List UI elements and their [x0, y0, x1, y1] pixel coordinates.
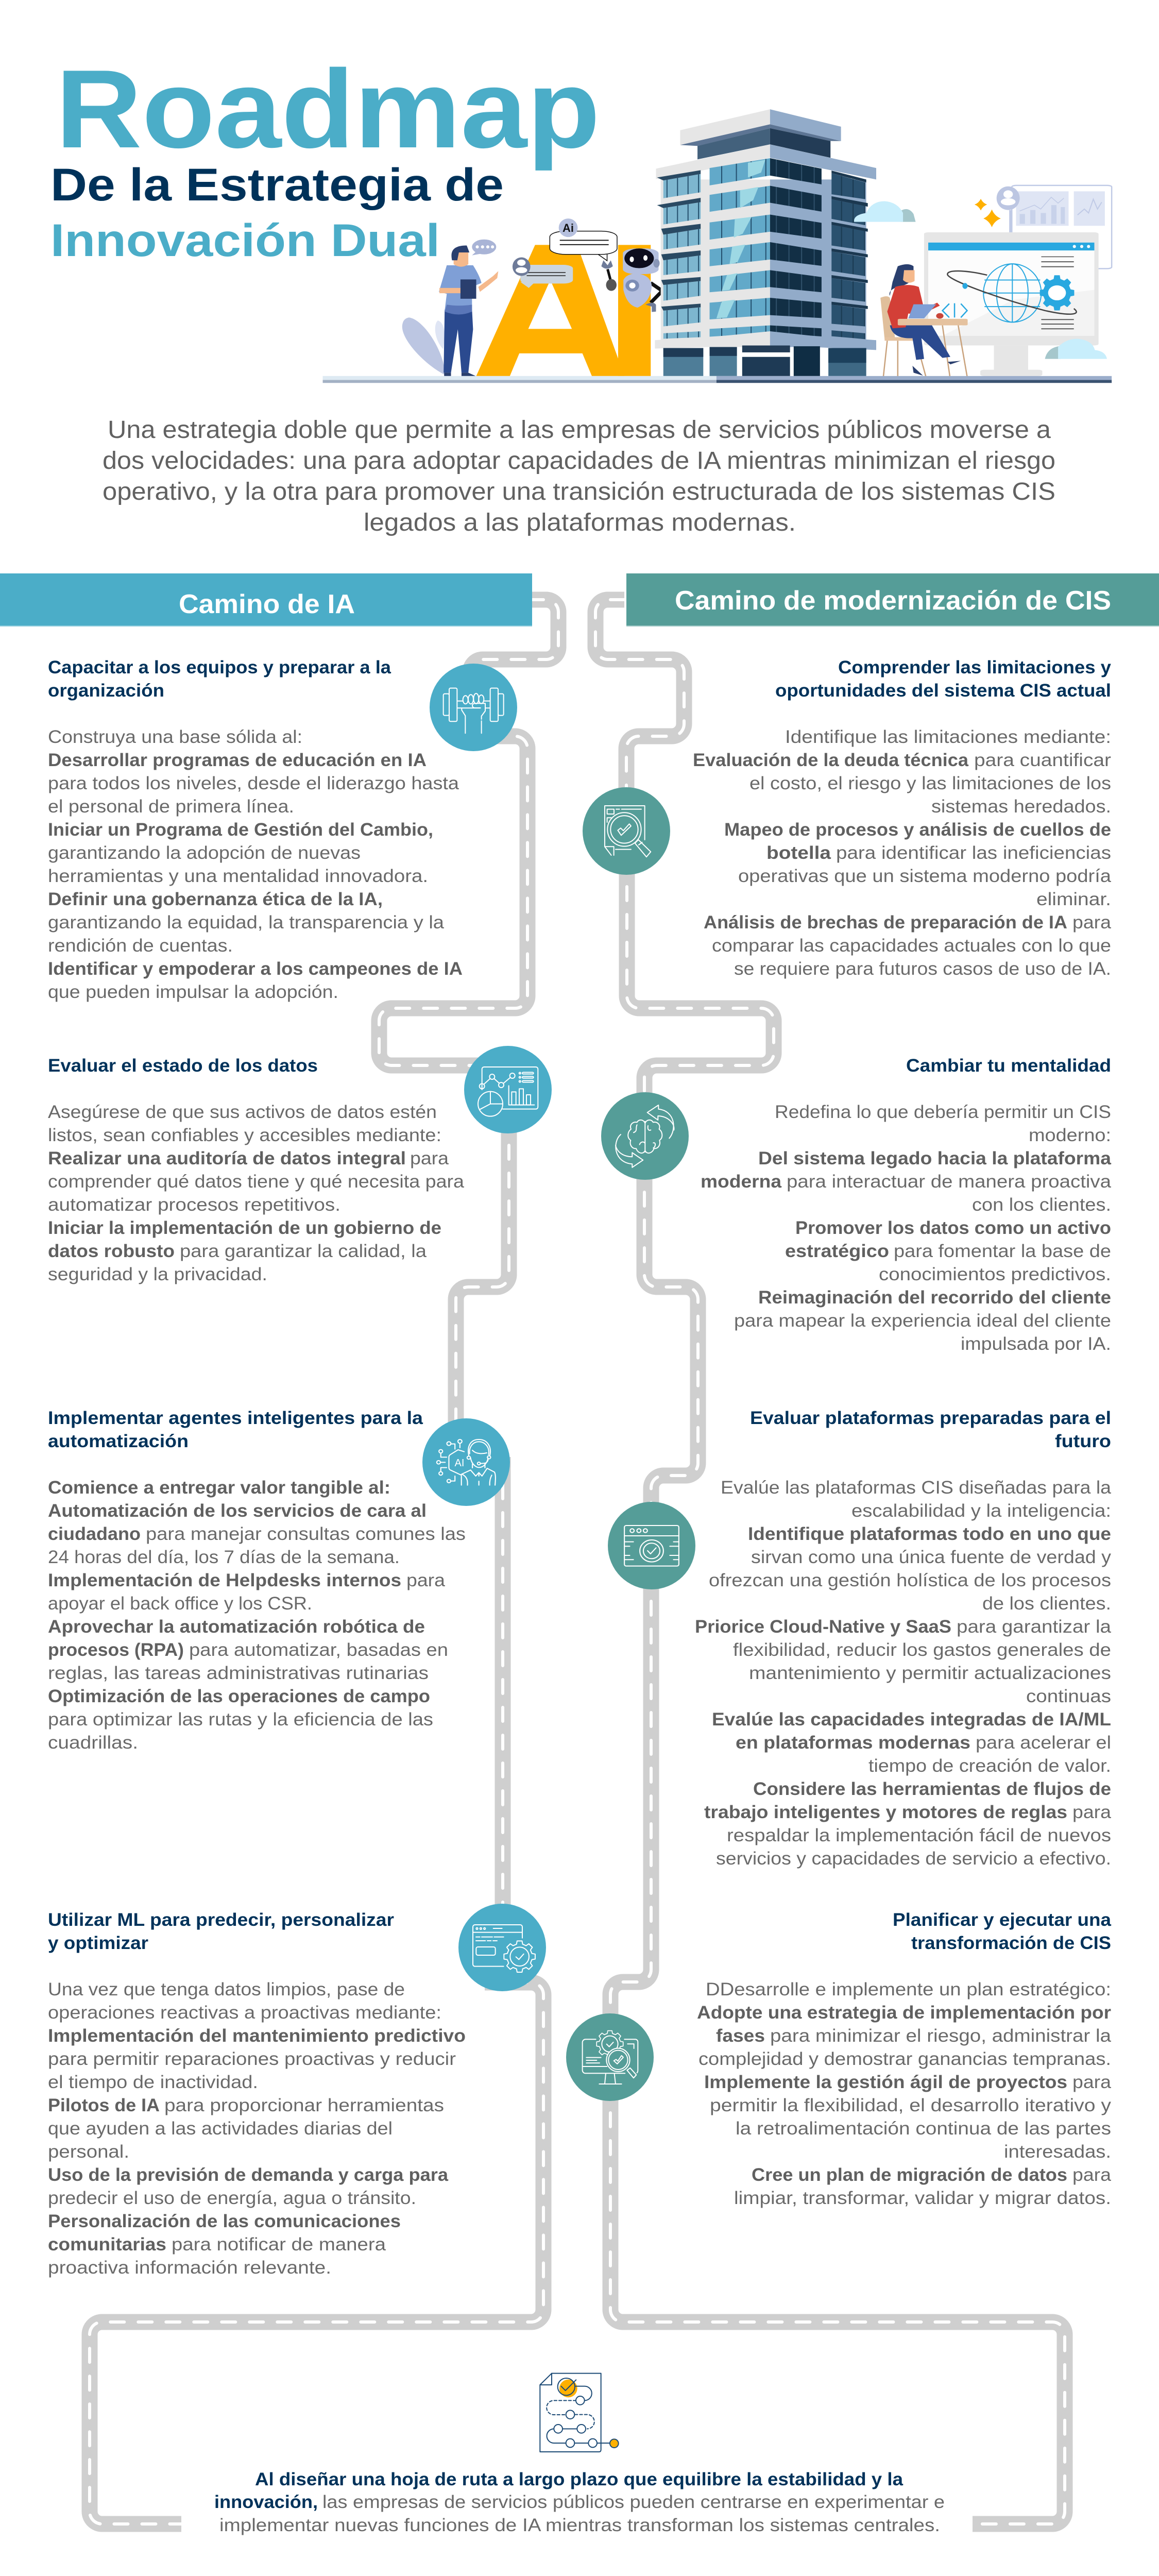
icon: AI chat bubble	[550, 218, 617, 261]
text block: comparar las capacidades actuales con lo que	[712, 936, 1111, 956]
text block: Del sistema legado hacia la plataforma	[758, 1148, 1112, 1168]
text block: Considere las herramientas de flujos de	[753, 1779, 1111, 1799]
text block: garantizando la equidad, la transparencia y la	[48, 912, 445, 933]
heading: y optimizar	[48, 1933, 148, 1953]
panel: Evaluar el estado de los datos	[48, 1056, 465, 1284]
panel: Capacitar a los equipos	[48, 657, 463, 1002]
text block: que pueden impulsar la adopción.	[48, 982, 338, 1002]
text block: Evaluación de la deuda técnica	[693, 750, 969, 770]
icon: AI agent with headset	[422, 1418, 510, 1506]
text block: Mapeo de procesos y análisis de cuellos de	[724, 820, 1111, 840]
text block: moderna	[701, 1172, 782, 1192]
text block: Iniciar la implementación de un gobierno de	[48, 1218, 441, 1238]
header: Camino de IA	[0, 573, 532, 626]
icon: roadmap document	[540, 2374, 619, 2452]
text block: Pilotos de IA	[48, 2095, 160, 2115]
text block: para minimizar el riesgo, administrar la	[770, 2026, 1112, 2046]
text block: eliminar.	[1036, 889, 1111, 909]
text block: la retroalimentación continua de las partes	[736, 2119, 1111, 2139]
text block: listos, sean confiables y accesibles mediante:	[48, 1125, 441, 1145]
heading: Evaluar el estado de los datos	[48, 1056, 318, 1076]
closing statement: Al diseñar una hoja de ruta a largo plazo que equilibre la estabilidad y la	[255, 2469, 904, 2489]
text block: para cuantificar	[974, 750, 1111, 770]
closing statement: innovación,	[214, 2492, 318, 2512]
text block: Optimización de las operaciones de campo	[48, 1686, 430, 1706]
text block: para	[410, 1148, 449, 1168]
heading	[750, 1408, 1111, 1451]
text block: Identificar y empoderar a los campeones de IA	[48, 959, 463, 979]
icon: plant	[402, 317, 445, 375]
text block: moderno:	[1029, 1125, 1111, 1145]
heading: transformación de CIS	[911, 1933, 1111, 1953]
panel: Cambiar tu mentalidad	[701, 1056, 1112, 1354]
text block: se requiere para futuros casos de uso de IA.	[734, 959, 1111, 979]
text block: de los clientes.	[982, 1594, 1111, 1614]
text block: Identifique plataformas todo en uno que	[748, 1524, 1111, 1544]
text block: procesos (RPA)	[48, 1640, 184, 1660]
heading	[48, 657, 391, 701]
text block	[695, 1478, 1112, 1869]
text block	[697, 1979, 1112, 2208]
text block: garantizando la adopción de nuevas	[48, 843, 361, 863]
text block: Uso de la previsión de demanda y carga para	[48, 2165, 449, 2185]
header: Camino de modernización de CIS	[626, 573, 1159, 626]
header: Camino de IA: Camino de IA	[179, 589, 355, 619]
closing statement	[214, 2469, 945, 2535]
heading: futuro	[1055, 1431, 1111, 1451]
text block: seguridad y la privacidad.	[48, 1264, 267, 1284]
text block: personal.	[48, 2142, 129, 2162]
heading: automatización	[48, 1431, 189, 1451]
heading: Evaluar plataformas preparadas para el	[750, 1408, 1111, 1428]
text block: proactiva información relevante.	[48, 2258, 331, 2278]
text block: en plataformas modernas	[736, 1733, 970, 1753]
heading: Capacitar a los equipos y preparar a la	[48, 657, 391, 677]
text block: para manejar consultas comunes las	[146, 1524, 466, 1544]
illustration: AI, building, people and monitor	[323, 109, 1112, 383]
text block: con los clientes.	[972, 1195, 1111, 1215]
closing statement: implementar nuevas funciones de IA mientras transforman los sistemas centrales.	[219, 2515, 940, 2535]
text block: para garantizar la calidad, la	[180, 1241, 427, 1261]
text block: tiempo de creación de valor.	[868, 1756, 1111, 1776]
text block: para automatizar, basadas en	[189, 1640, 448, 1660]
text block: Implementación de Helpdesks internos	[48, 1570, 401, 1590]
text block: para mapear la experiencia ideal del cliente	[734, 1311, 1111, 1331]
intro text: Una estrategia doble que permite a las empresas de servicios públicos moverse a	[108, 416, 1051, 444]
icon: clouds	[854, 201, 916, 222]
heading: Cambiar tu mentalidad	[906, 1056, 1111, 1076]
text block: reglas, las tareas administrativas rutinarias	[48, 1663, 429, 1683]
text block: servicios y capacidades de servicio a efectivo.	[716, 1849, 1111, 1869]
text block: Personalización de las comunicaciones	[48, 2211, 401, 2231]
text block	[701, 1102, 1112, 1354]
text block: para todos los niveles, desde el liderazgo hasta	[48, 773, 459, 793]
heading: Comprender las limitaciones y	[838, 657, 1112, 677]
panel: Evaluar plataformas preparadas	[695, 1408, 1112, 1869]
text block: flexibilidad, reducir los gastos generales de	[733, 1640, 1111, 1660]
text block: permitir la flexibilidad, el desarrollo iterativo y	[710, 2095, 1112, 2115]
text block: Implemente la gestión ágil de proyectos	[704, 2072, 1067, 2092]
heading	[48, 1408, 423, 1451]
text block: para acelerar el	[976, 1733, 1111, 1753]
text block: DDesarrolle e implemente un plan estratégico:	[706, 1979, 1111, 1999]
icon: office building	[655, 109, 876, 376]
text block: el tiempo de inactividad.	[48, 2072, 258, 2092]
text block: continuas	[1026, 1686, 1111, 1706]
text block: trabajo inteligentes y motores de reglas	[704, 1802, 1067, 1822]
text block	[48, 1102, 465, 1284]
panel: Utilizar ML	[48, 1910, 466, 2278]
text block: Cree un plan de migración de datos	[752, 2165, 1067, 2185]
text block: escalabilidad y la inteligencia:	[851, 1501, 1111, 1521]
text block: Análisis de brechas de preparación de IA	[704, 912, 1067, 933]
text block: Realizar una auditoría de datos integral	[48, 1148, 406, 1168]
text block: Iniciar un Programa de Gestión del Cambio,	[48, 820, 433, 840]
icon: data dashboard	[464, 1046, 552, 1133]
text block: que ayuden a las actividades diarias del	[48, 2119, 393, 2139]
intro text: operativo, y la otra para promover una transición estructurada de los sistemas CIS	[103, 478, 1055, 505]
text block: operaciones reactivas a proactivas mediante:	[48, 2003, 441, 2023]
header: Camino de modernización de CIS: Camino de modernización de CIS	[675, 586, 1111, 616]
heading: Utilizar ML para predecir, personalizar	[48, 1910, 394, 1930]
text block: botella	[766, 843, 831, 863]
text block: Evalúe las plataformas CIS diseñadas para la	[721, 1478, 1112, 1498]
text block: cuadrillas.	[48, 1733, 138, 1753]
icon: dumbbell in fist	[430, 664, 517, 751]
text block: automatizar procesos repetitivos.	[48, 1195, 340, 1215]
label: Ai on chat badge: Ai	[563, 222, 574, 234]
text block: comprender qué datos tiene y qué necesita para	[48, 1172, 465, 1192]
text block: Adopte una estrategia de implementación por	[697, 2003, 1111, 2023]
icon: AI letters	[476, 245, 651, 376]
icon: man with tablet	[439, 240, 498, 376]
text block: Aprovechar la automatización robótica de	[48, 1617, 425, 1637]
roadmap roads	[90, 600, 1065, 2524]
text block: estratégico	[785, 1241, 889, 1261]
intro text	[103, 416, 1055, 536]
text block: para	[406, 1570, 446, 1590]
text block	[48, 727, 463, 1002]
icon: monitor with gear and magnifier	[566, 2013, 654, 2101]
text block: conocimientos predictivos.	[879, 1264, 1111, 1284]
text block: comunitarias	[48, 2234, 166, 2255]
icon: browser with settings gear	[458, 1904, 546, 1991]
text block: para	[1072, 1802, 1112, 1822]
text block: apoyar el back office y los CSR.	[48, 1594, 312, 1614]
icon: verified browser window	[608, 1502, 695, 1589]
subtitle: De la Estrategia de: De la Estrategia de	[50, 159, 504, 210]
icon: sparkles	[975, 199, 1001, 227]
icon: AI agent with headset: AI	[455, 1458, 464, 1469]
text block: para optimizar las rutas y la eficiencia de las	[48, 1709, 433, 1730]
text block: Comience a entregar valor tangible al:	[48, 1478, 390, 1498]
heading: oportunidades del sistema CIS actual	[775, 681, 1111, 701]
text block: fases	[716, 2026, 765, 2046]
text block: impulsada por IA.	[961, 1334, 1111, 1354]
title	[50, 46, 600, 266]
text block: 24 horas del día, los 7 días de la semana.	[48, 1547, 400, 1567]
text block: Construya una base sólida al:	[48, 727, 302, 747]
text block: rendición de cuentas.	[48, 936, 233, 956]
text block: el costo, el riesgo y las limitaciones de los	[749, 773, 1111, 793]
text block: Implementación del mantenimiento predictivo	[48, 2026, 466, 2046]
intro text: dos velocidades: una para adoptar capacidades de IA mientras minimizan el riesgo	[103, 447, 1055, 474]
text block: respaldar la implementación fácil de nuevos	[727, 1825, 1111, 1845]
text block	[48, 1979, 466, 2278]
heading	[775, 657, 1112, 701]
panel: Comprender las limitaciones	[693, 657, 1112, 979]
text block: limpiar, transformar, validar y migrar datos.	[734, 2188, 1111, 2208]
text block: interesadas.	[1004, 2142, 1111, 2162]
text block: Automatización de los servicios de cara al	[48, 1501, 427, 1521]
subtitle: Innovación Dual: Innovación Dual	[50, 214, 440, 266]
heading: Planificar y ejecutar una	[893, 1910, 1112, 1930]
title: Roadmap: Roadmap	[56, 46, 600, 171]
closing statement: las empresas de servicios públicos pueden centrarse en experimentar e	[322, 2492, 945, 2512]
text block: herramientas y una mentalidad innovadora.	[48, 866, 428, 886]
text block	[693, 727, 1112, 979]
heading	[48, 1910, 394, 1953]
text block: ciudadano	[48, 1524, 141, 1544]
text block: operativas que un sistema moderno podría	[738, 866, 1112, 886]
text block: para interactuar de manera proactiva	[787, 1172, 1112, 1192]
heading: organización	[48, 681, 164, 701]
text block: Redefina lo que debería permitir un CIS	[775, 1102, 1111, 1122]
panel: Planificar y ejecutar	[697, 1910, 1112, 2208]
text block: Evalúe las capacidades integradas de IA/ML	[712, 1709, 1111, 1730]
icon: woman at laptop	[880, 264, 968, 382]
text block: Definir una gobernanza ética de la IA,	[48, 889, 383, 909]
text block: Asegúrese de que sus activos de datos estén	[48, 1102, 437, 1122]
text block: Priorice Cloud-Native y SaaS	[695, 1617, 951, 1637]
text block: datos robusto	[48, 1241, 175, 1261]
icon: cloud lower right	[1045, 339, 1107, 359]
intro text: legados a las plataformas modernas.	[364, 509, 796, 536]
text block: para	[1072, 2165, 1112, 2185]
text block: complejidad y demostrar ganancias tempranas.	[698, 2049, 1111, 2069]
text block: predecir el uso de energía, agua o tránsito.	[48, 2188, 416, 2208]
text block: sirvan como una única fuente de verdad y	[751, 1547, 1112, 1567]
heading: Implementar agentes inteligentes para la	[48, 1408, 423, 1428]
text block: sistemas heredados.	[931, 796, 1111, 817]
icon: document under magnifier	[583, 787, 670, 875]
text block: para identificar las ineficiencias	[836, 843, 1111, 863]
text block	[48, 1478, 466, 1753]
text block: Desarrollar programas de educación en IA	[48, 750, 427, 770]
text block: para notificar de manera	[172, 2234, 386, 2255]
text block: para proporcionar herramientas	[164, 2095, 444, 2115]
text block: mantenimiento y permitir actualizaciones	[749, 1663, 1111, 1683]
text block: ofrezcan una gestión holística de los procesos	[709, 1570, 1111, 1590]
text block: para garantizar la	[957, 1617, 1112, 1637]
text block: Reimaginación del recorrido del cliente	[758, 1287, 1111, 1308]
text block: para	[1072, 2072, 1112, 2092]
icon: monitor with globe and gear	[924, 232, 1099, 376]
panel: Implementar agentes inteligentes	[48, 1408, 466, 1753]
text block: Promover los datos como un activo	[795, 1218, 1111, 1238]
ground bar	[323, 376, 1112, 383]
text block: Identifique las limitaciones mediante:	[785, 727, 1111, 747]
text block: para permitir reparaciones proactivas y reducir	[48, 2049, 456, 2069]
icon: user chat bubble	[513, 258, 573, 288]
text block: Una vez que tenga datos limpios, pase de	[48, 1979, 405, 1999]
text block: el personal de primera línea.	[48, 796, 294, 817]
heading	[893, 1910, 1112, 1953]
icon: back panel with charts	[997, 185, 1112, 268]
icon: brain with arrows	[601, 1092, 689, 1180]
text block: para fomentar la base de	[894, 1241, 1111, 1261]
text block: para	[1072, 912, 1112, 933]
icon: robot	[601, 248, 662, 312]
